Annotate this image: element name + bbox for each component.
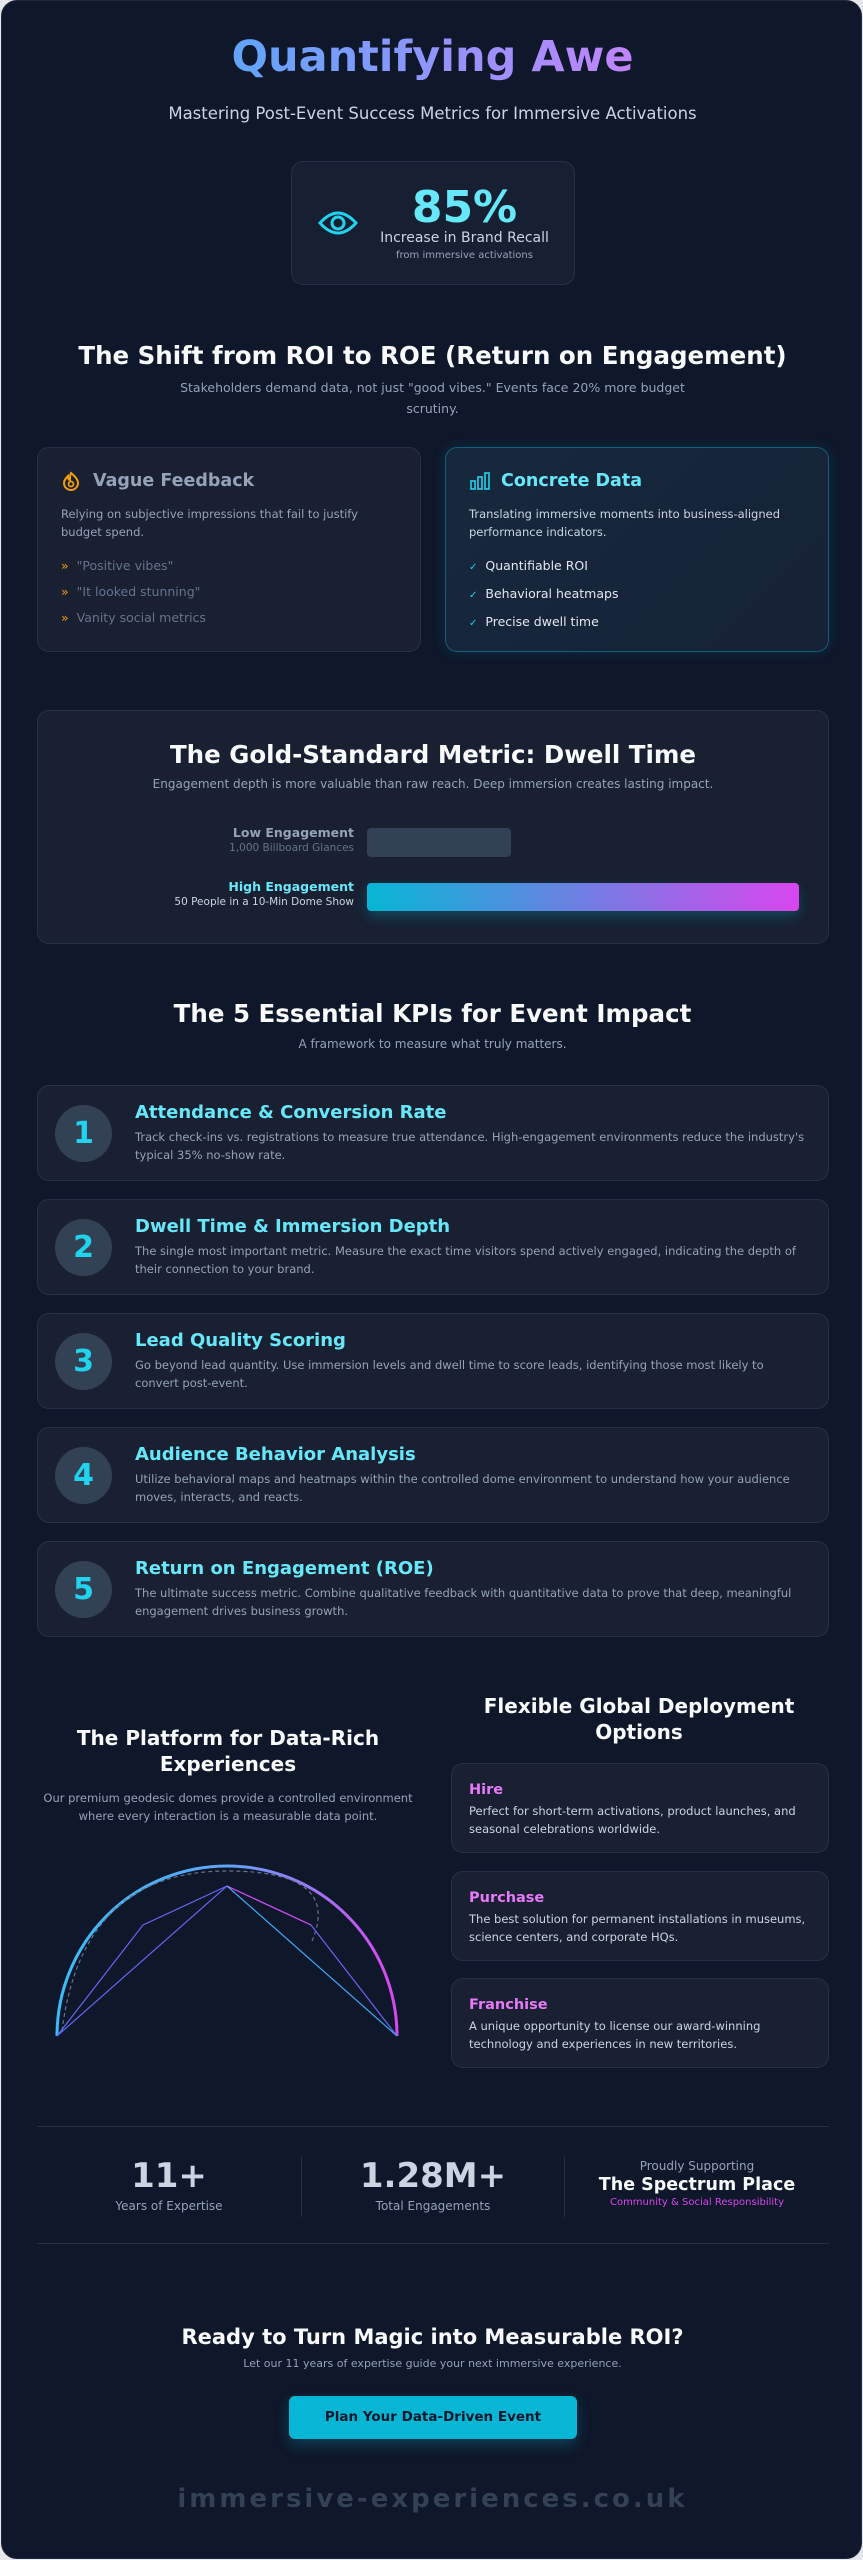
heading: 5 KPIs: The 5 Essential KPIs for Event Impact (174, 999, 691, 1028)
option: purchase: The best solution for permanent installations in museums, science centers, and corporate HQs. (469, 1912, 805, 1944)
heading: Vague Feedback (93, 471, 254, 491)
low label (229, 825, 354, 854)
KPI 4: Audience Behavior Analysis (135, 1444, 416, 1465)
list (61, 558, 206, 625)
stat label: Increase in Brand Recall (380, 230, 549, 246)
heading: Concrete Data (501, 471, 642, 491)
KPI 2 (37, 1199, 829, 1295)
icon: fire (63, 472, 79, 491)
title: Quantifying Awe (231, 32, 634, 82)
option: purchase (451, 1871, 829, 1961)
KPI 2: The single most important metric. Measure the exact time visitors spend actively engaged, indicating the depth of their connection to your brand. (135, 1244, 796, 1276)
high label: High Engagement (228, 879, 354, 894)
high label (174, 879, 354, 908)
stat: years: 11+ (131, 2156, 207, 2196)
subtext: Stakeholders demand data, not just "good vibes." Events face 20% more budget scrutiny. (180, 380, 685, 416)
stat: spectrum place (598, 2159, 795, 2208)
dome illustration (56, 1864, 398, 2036)
stats strip (37, 2126, 829, 2244)
CTA heading: Ready to Turn Magic into Measurable ROI? (181, 2325, 684, 2349)
bar chart: engagement (174, 825, 804, 922)
description: Translating immersive moments into business-aligned performance indicators. (469, 507, 780, 539)
panel: concrete data (445, 447, 829, 652)
heading: ROI to ROE: The Shift from ROI to ROE (Return on Engagement) (78, 341, 787, 370)
KPI 2: Dwell Time & Immersion Depth (135, 1216, 450, 1237)
KPI 5: Return on Engagement (ROE) (135, 1558, 434, 1579)
list: ✓ Quantifiable ROI (469, 558, 588, 573)
heading: The Gold-Standard Metric: Dwell Time (170, 740, 696, 769)
description: Relying on subjective impressions that fail to justify budget spend. (61, 507, 358, 539)
list: » "It looked stunning" (61, 584, 200, 599)
panel: dwell time (37, 710, 829, 944)
stat: years: Years of Expertise (115, 2199, 223, 2213)
low label: Low Engagement (233, 825, 354, 840)
KPI 4: 4 (73, 1458, 94, 1493)
low bar (367, 828, 511, 857)
stat number: 85% (412, 182, 517, 233)
option: hire: Perfect for short-term activations, product launches, and seasonal celebrations worldwide. (469, 1804, 796, 1836)
KPI 3: Lead Quality Scoring (135, 1330, 346, 1351)
KPI 4 (37, 1427, 829, 1523)
KPI 1 (37, 1085, 829, 1181)
list (469, 558, 618, 629)
option: franchise (451, 1978, 829, 2068)
KPI 4: Utilize behavioral maps and heatmaps within the controlled dome environment to understand how your audience moves, interacts, and reacts. (135, 1472, 790, 1504)
KPI 3 (37, 1313, 829, 1409)
CTA button: Plan Your Data-Driven Event (325, 2409, 541, 2425)
KPI 5: The ultimate success metric. Combine qualitative feedback with quantitative data to prove that deep, meaningful engagement drives business growth. (135, 1586, 791, 1618)
stat: engagements: 1.28M+ (360, 2156, 506, 2196)
KPI 1: Track check-ins vs. registrations to measure true attendance. High-engagement environments reduce the industry's typical 35% no-show rate. (135, 1130, 804, 1162)
list: ✓ Precise dwell time (469, 614, 599, 629)
option: hire: Hire (469, 1782, 503, 1798)
option: franchise: A unique opportunity to license our award-winning technology and experiences in new territories. (469, 2019, 760, 2051)
KPI 5: 5 (73, 1572, 94, 1607)
list: » "Positive vibes" (61, 558, 173, 573)
KPI 1: Attendance & Conversion Rate (135, 1102, 446, 1123)
option: purchase: Purchase (469, 1890, 544, 1906)
KPI 1: 1 (73, 1116, 94, 1151)
high label: 50 People in a 10-Min Dome Show (174, 896, 354, 908)
platform text: Our premium geodesic domes provide a controlled environment where every interaction is a measurable data point. (43, 1791, 413, 1823)
stat: spectrum place: Community & Social Responsibility (610, 2197, 784, 2208)
footer URL: immersive-experiences.co.uk (177, 2484, 688, 2514)
low label: 1,000 Billboard Glances (229, 842, 354, 854)
stat: spectrum place: Proudly Supporting (640, 2159, 754, 2173)
CTA button (289, 2396, 577, 2439)
subtext: Engagement depth is more valuable than raw reach. Deep immersion creates lasting impact. (153, 777, 713, 791)
stat note: from immersive activations (396, 250, 533, 261)
panel: vague feedback (37, 447, 421, 652)
option: hire (451, 1763, 829, 1853)
stat: engagements (301, 2157, 565, 2217)
stat: spectrum place: The Spectrum Place (599, 2175, 795, 2195)
icon: bar chart (470, 472, 490, 490)
high bar (367, 883, 799, 911)
list: » Vanity social metrics (61, 610, 206, 625)
CTA subtext: Let our 11 years of expertise guide your next immersive experience. (243, 2357, 622, 2370)
KPI 3: 3 (73, 1344, 94, 1379)
subtitle: Mastering Post-Event Success Metrics for Immersive Activations (168, 104, 697, 123)
KPI 3: Go beyond lead quantity. Use immersion levels and dwell time to score leads, identifying those most likely to convert post-event. (135, 1358, 764, 1390)
icon: eye (318, 212, 358, 234)
KPI 5 (37, 1541, 829, 1637)
stat card: 85% (291, 161, 575, 285)
stat: engagements: Total Engagements (376, 2199, 490, 2213)
list: ✓ Behavioral heatmaps (469, 586, 618, 601)
option: franchise: Franchise (469, 1997, 548, 2013)
heading: deployment options: Flexible Global Deployment Options (484, 1694, 794, 1744)
KPI 2: 2 (73, 1230, 94, 1265)
subtext: A framework to measure what truly matters. (298, 1037, 567, 1051)
heading: platform: The Platform for Data-Rich Experiences (77, 1726, 379, 1776)
stat: years (115, 2156, 223, 2213)
